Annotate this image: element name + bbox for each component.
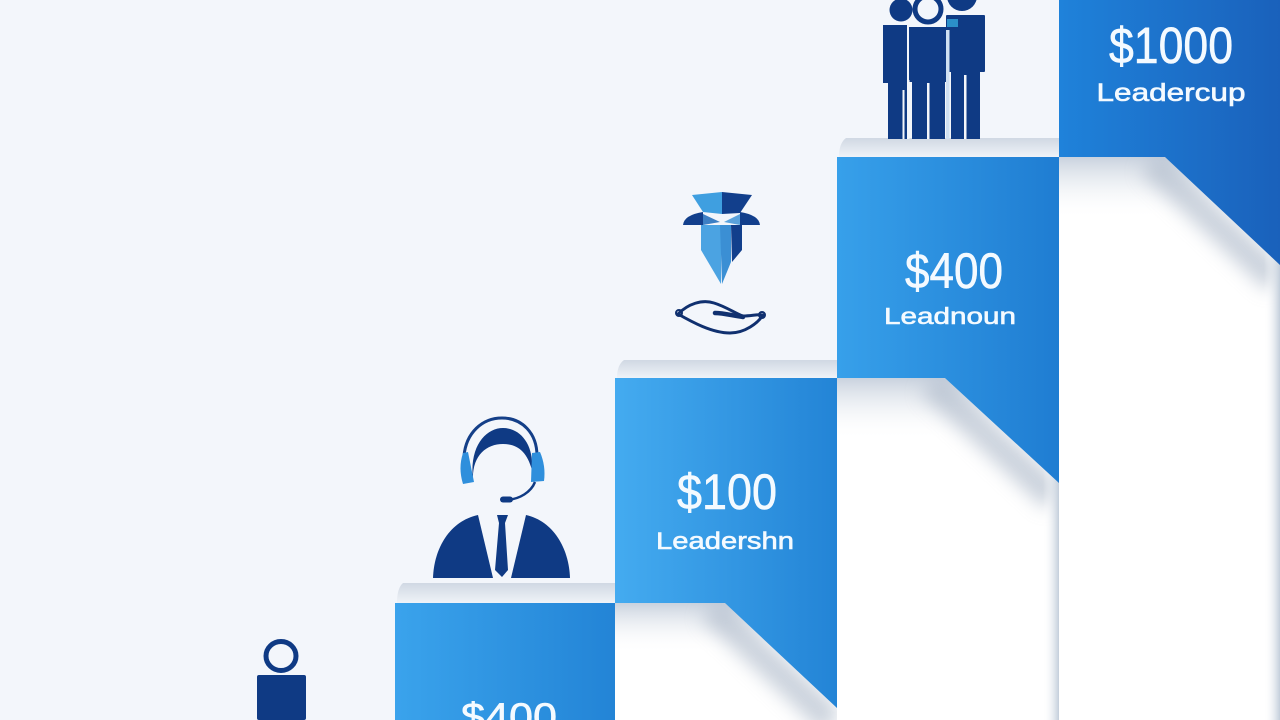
- step 2 value: $100: [677, 464, 777, 520]
- step 2 label: Leadershn: [656, 528, 794, 555]
- icon: single person: [257, 642, 306, 720]
- step 2 ledge: [617, 360, 837, 378]
- panel: white column under step 2: [615, 600, 840, 720]
- step 4 value: $1000: [1109, 17, 1233, 74]
- step 1 ledge: [397, 583, 615, 603]
- step 3 label: Leadnoun: [884, 303, 1016, 329]
- icon: person with headset: [433, 418, 570, 578]
- step 4 label: Leadercup: [1096, 79, 1246, 107]
- panel: step 3: [837, 157, 1059, 483]
- step 3 value: $400: [905, 243, 1003, 299]
- panel: step 1: [395, 603, 615, 720]
- panel: white column under step 3: [837, 375, 1062, 720]
- icon: group of three people: [883, 0, 985, 139]
- panel: white column under step 4: [1059, 154, 1280, 720]
- staircase infographic: [257, 0, 1280, 720]
- step 3 ledge: [839, 138, 1059, 157]
- icon: graduation cap over pen and open hand: [676, 192, 765, 333]
- panel: step 2: [615, 378, 837, 708]
- panel: step 4: [1059, 0, 1280, 265]
